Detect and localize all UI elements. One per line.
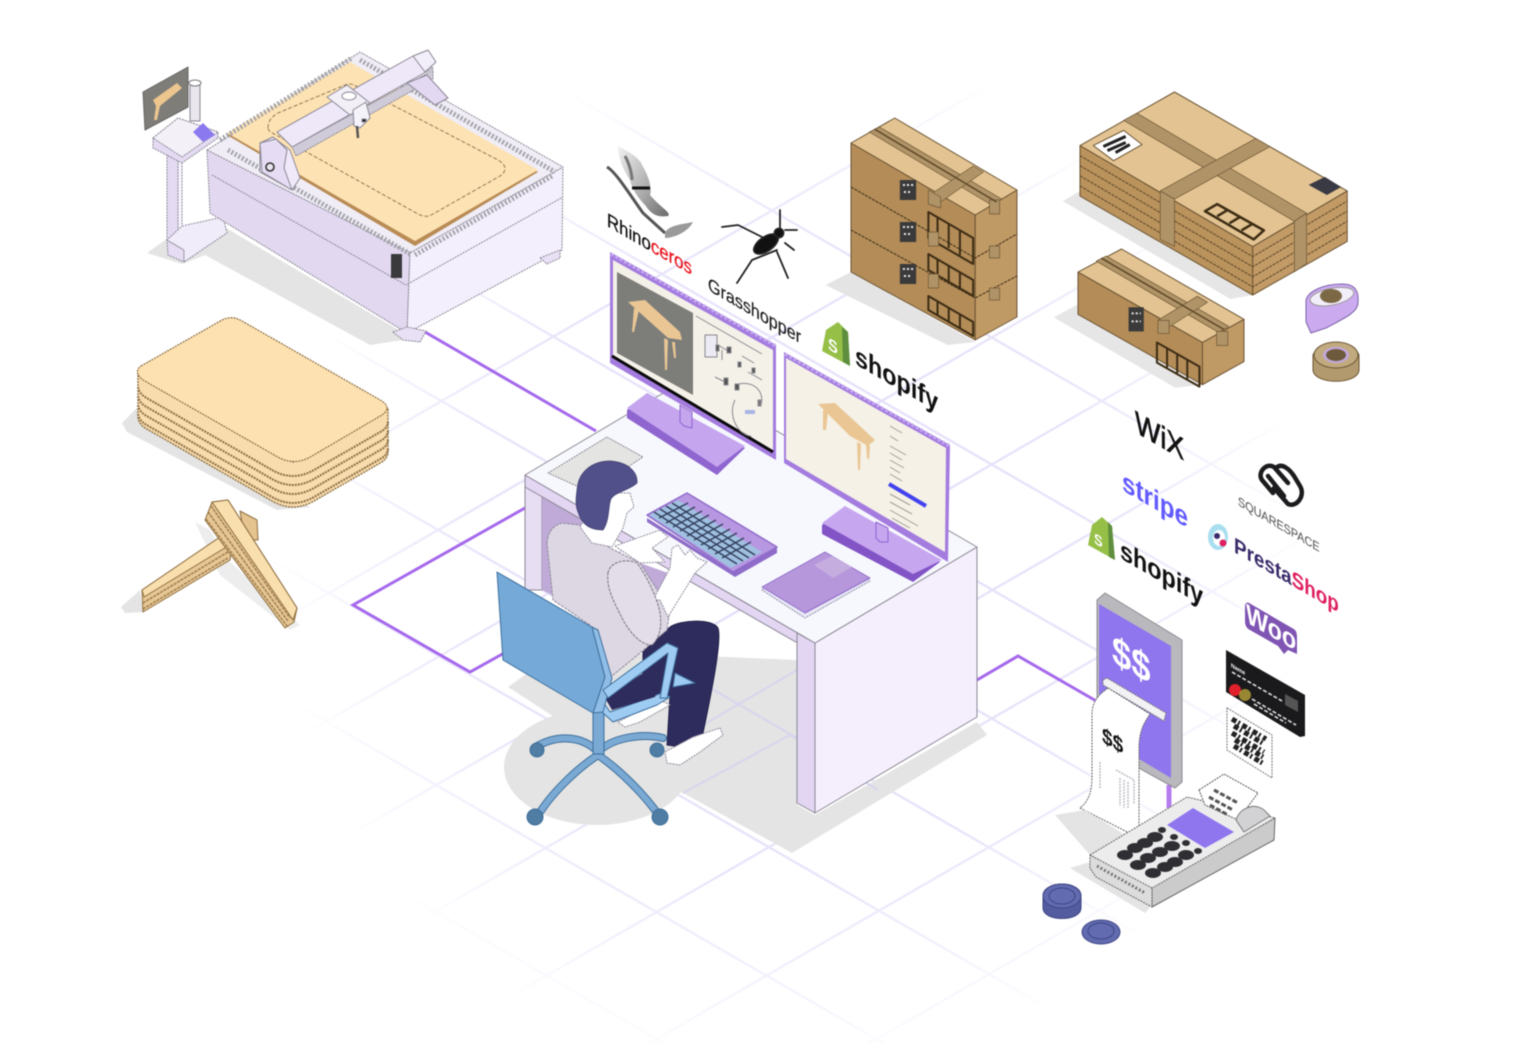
grasshopper node graph <box>696 316 762 436</box>
terminal shadow <box>1070 862 1152 913</box>
logo: Shopify top <box>822 322 938 418</box>
control stand <box>153 118 227 262</box>
bed rails <box>220 58 555 255</box>
credit card <box>1226 650 1305 737</box>
stack flap patches <box>928 232 1000 300</box>
right stand base <box>822 506 942 582</box>
stack seams <box>851 187 1017 298</box>
receipt lines <box>1100 762 1134 808</box>
terminal keys <box>1117 827 1202 878</box>
receipt <box>1080 688 1150 838</box>
credit card: Name <box>1231 663 1246 677</box>
flat parcel stack <box>1063 92 1347 299</box>
wood sheet on bed <box>227 62 538 246</box>
table model right <box>818 403 875 470</box>
notebook label <box>814 556 852 578</box>
stand pole and tablet <box>143 67 215 142</box>
logo: Woo: Woo <box>1246 598 1296 657</box>
terminal side <box>1152 818 1275 907</box>
terminal top <box>1090 797 1275 888</box>
torso <box>547 523 670 680</box>
far shoe <box>618 700 670 727</box>
chair armrest <box>603 643 678 698</box>
gantry <box>260 50 448 190</box>
mouse pad <box>548 437 643 492</box>
desk floor shadow <box>508 650 987 853</box>
phone screen <box>1099 604 1171 778</box>
rhino wordmark: Rhinoceros <box>607 209 692 280</box>
machine switch box <box>391 254 402 278</box>
grasshopper wordmark: Grasshopper <box>708 273 801 348</box>
desk side panel <box>815 547 977 813</box>
grasshopper insect <box>722 210 797 283</box>
flat parcel tape <box>1124 113 1307 272</box>
receipt amount: $$ <box>1102 722 1123 759</box>
terminal paper roll <box>1236 806 1270 832</box>
rhino horn mark <box>607 146 693 238</box>
plank two <box>205 500 297 628</box>
notebook <box>762 552 870 618</box>
machine shadow <box>147 228 407 345</box>
connector: phone to terminal <box>1166 785 1172 808</box>
stack label speckle <box>903 185 913 276</box>
QR code <box>1227 708 1272 778</box>
right screen <box>786 358 946 552</box>
stack of wood sheets <box>122 318 388 510</box>
tape roll <box>1313 342 1359 381</box>
flat parcel QR label <box>1093 130 1142 161</box>
monitor right <box>784 352 950 582</box>
flat parcel layers <box>1080 156 1347 287</box>
phone with receipt <box>1080 593 1182 838</box>
plank one <box>142 537 232 612</box>
shopify wordmark: shopify <box>855 340 938 418</box>
collar and face <box>580 493 634 547</box>
right screen frame <box>784 352 950 562</box>
top sheet <box>137 318 387 462</box>
stack left face <box>851 143 975 340</box>
left screen frame <box>610 252 776 460</box>
sheet stack sides <box>138 372 388 507</box>
stack right face <box>975 190 1017 340</box>
terminal printer slip <box>1199 774 1258 820</box>
office chair <box>497 572 695 825</box>
chair casters <box>527 743 668 825</box>
desk left leg <box>525 475 542 590</box>
flat parcel shadow <box>1063 191 1253 299</box>
connector: desk loop <box>353 508 525 672</box>
far plank end <box>240 511 258 540</box>
logo: Shopify bag <box>1088 517 1115 560</box>
sheet layer lines <box>138 387 388 503</box>
stack tape seam <box>874 129 997 202</box>
printer slip text lines <box>1209 790 1238 815</box>
hair <box>576 461 637 530</box>
payment terminal <box>1055 774 1275 913</box>
small box top <box>1078 249 1244 342</box>
crossed wooden planks <box>121 500 300 630</box>
logo: Shopify wordmark: shopify <box>1120 534 1203 612</box>
logo: Stripe: stripe <box>1122 465 1188 534</box>
opening under armrest <box>605 660 663 710</box>
stack tape <box>869 127 1002 214</box>
flat parcel left face <box>1080 146 1253 295</box>
upper arm <box>608 561 661 645</box>
small box shadow <box>1054 304 1202 388</box>
chair back <box>497 572 605 713</box>
box stack <box>826 118 1017 345</box>
floor grid over shadow <box>657 670 878 793</box>
armrest wing <box>673 673 695 687</box>
coins <box>1043 884 1120 944</box>
stack labels <box>900 180 916 284</box>
table model left <box>628 300 682 370</box>
small box icons <box>1157 342 1199 387</box>
logo: Grasshopper <box>708 210 801 348</box>
person at desk <box>547 461 723 765</box>
connector: desk to phone <box>977 656 1098 702</box>
small box tape <box>1096 256 1229 345</box>
3D viewport <box>617 272 693 395</box>
stack top <box>851 118 1017 215</box>
small box QR speckle <box>1132 313 1141 321</box>
single coin <box>1082 920 1120 944</box>
near hand and forearm <box>653 545 707 617</box>
chair floor shadow <box>504 709 690 825</box>
cutting head <box>327 85 370 138</box>
buy button <box>889 484 926 506</box>
monitor left <box>610 252 776 475</box>
logo: PrestaShop icon <box>1208 524 1228 550</box>
small box left face <box>1078 272 1202 385</box>
flat parcel handling marks <box>1205 204 1264 239</box>
flat parcel right face <box>1253 191 1347 295</box>
phone body <box>1097 593 1182 788</box>
receipt slot <box>1103 678 1166 721</box>
logo: Squarespace wordmark: SQUARESPACE <box>1238 494 1320 555</box>
stack icons <box>928 212 973 336</box>
flat parcel corner label <box>1309 177 1341 195</box>
chair wheel base outline <box>534 736 663 817</box>
keyboard <box>647 493 777 577</box>
phone amount: $$ <box>1112 627 1151 693</box>
stack shadow <box>826 272 975 345</box>
desk front leg <box>797 633 815 813</box>
near leg <box>643 621 719 746</box>
small box right face <box>1202 319 1244 385</box>
small box tape seam <box>1101 258 1224 329</box>
chair seat <box>602 693 670 722</box>
connector: cutter to desk <box>425 332 596 431</box>
product options panel <box>890 426 918 528</box>
far arm shadow <box>640 563 668 598</box>
chair wheel base <box>534 736 663 817</box>
payment logos <box>1088 404 1339 778</box>
right bezel hatch <box>785 354 950 446</box>
logo: Squarespace mark <box>1261 466 1302 505</box>
terminal front vents <box>1097 866 1145 893</box>
chair post <box>593 712 604 754</box>
keyboard side <box>647 518 777 577</box>
desk <box>525 379 977 813</box>
sheet stack shadow <box>122 408 310 510</box>
left screen <box>613 260 773 450</box>
terminal screen <box>1167 808 1234 848</box>
machine body <box>207 52 563 342</box>
logo: Rhinoceros <box>607 146 693 280</box>
small box QR <box>1129 307 1144 331</box>
CNC cutting machine <box>143 50 563 345</box>
logo: Wix: WiX <box>1135 404 1184 468</box>
flat parcel top <box>1080 92 1347 247</box>
coin stack <box>1043 884 1081 918</box>
left screen black bar <box>612 356 773 452</box>
chair back edge <box>592 627 612 713</box>
keyboard keys <box>649 500 762 568</box>
near shoe <box>665 728 723 765</box>
desk top <box>525 379 977 643</box>
desk inner recess <box>542 495 600 620</box>
keyboard body <box>647 493 777 572</box>
plank shadow <box>121 590 143 613</box>
left bezel hatch <box>611 254 776 346</box>
terminal front <box>1090 855 1152 907</box>
shopify bag: S <box>828 334 838 359</box>
left stand base <box>627 393 745 475</box>
tape dispenser <box>1306 284 1358 333</box>
far arm <box>615 530 668 563</box>
small box <box>1054 249 1244 388</box>
desk front edge <box>525 475 815 653</box>
logo: PrestaShop wordmark: PrestaShop <box>1234 532 1339 618</box>
logo: Shopify bag: S <box>1094 530 1103 552</box>
